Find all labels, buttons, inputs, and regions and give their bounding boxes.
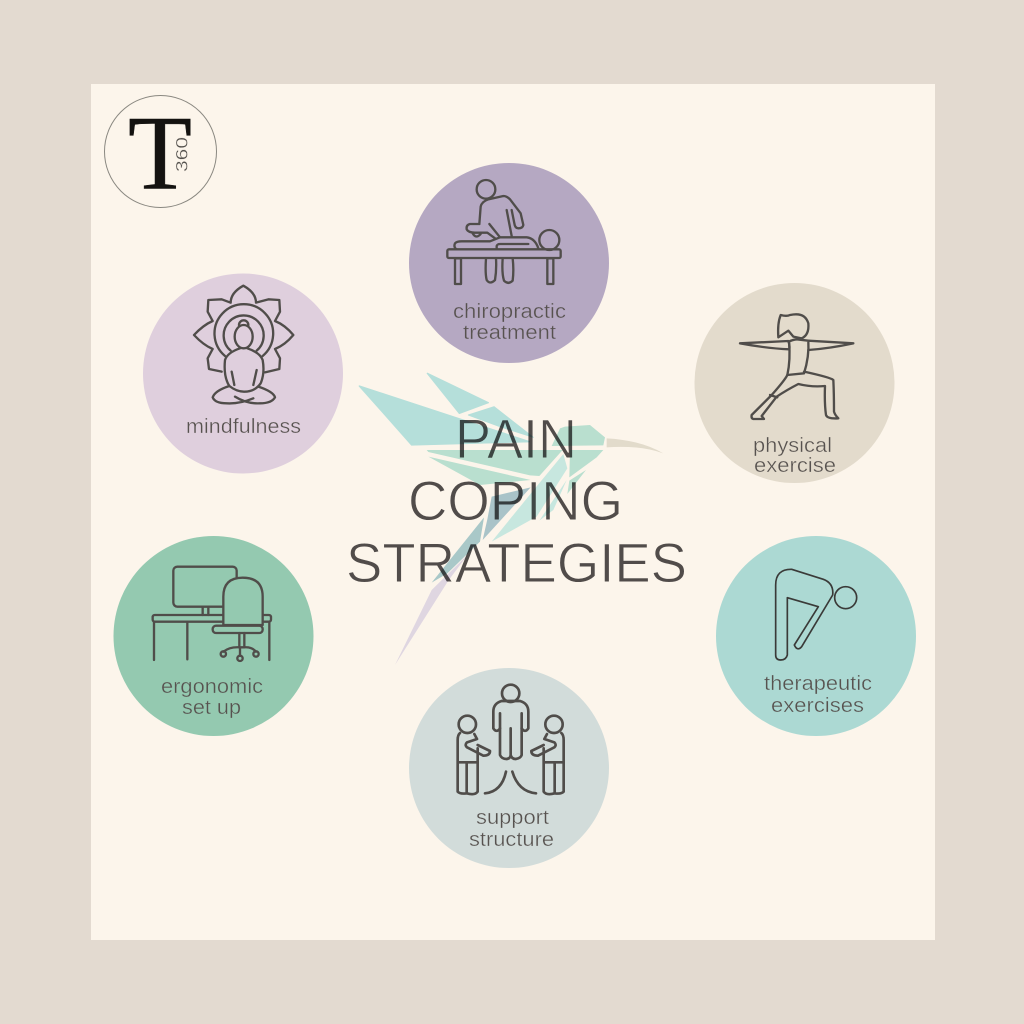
label: support structure: structure	[469, 829, 554, 851]
logo: T360	[104, 94, 216, 212]
label: support structure	[469, 807, 554, 851]
label: therapeutic exercises: therapeutic	[764, 673, 872, 695]
label: chiropractic treatment: chiropractic	[453, 301, 566, 323]
title: STRATEGIES	[346, 531, 687, 594]
panel: therapeutic exercises	[716, 536, 916, 736]
hummingbird watermark	[359, 373, 663, 665]
label: therapeutic exercises: exercises	[771, 695, 864, 717]
label: chiropractic treatment	[453, 301, 566, 344]
icon: warrior yoga pose	[740, 314, 853, 419]
panel: physical exercise	[694, 283, 894, 483]
icon: bending stretch figure	[776, 569, 857, 660]
panel: chiropractic treatment	[409, 163, 609, 363]
title	[346, 407, 687, 594]
label: ergonomic set up	[161, 676, 263, 719]
icon: desk, monitor and chair	[153, 567, 271, 661]
title: COPING	[408, 469, 623, 532]
panel: mindfulness	[143, 274, 343, 474]
label: physical exercise: exercise	[754, 455, 836, 477]
icon: three people supporting	[458, 685, 564, 794]
label: physical exercise	[753, 435, 836, 477]
label: ergonomic set up: ergonomic	[161, 676, 263, 698]
panel: ergonomic set up	[114, 536, 314, 736]
label: support structure: support	[476, 807, 549, 829]
logo: T360: T	[128, 94, 192, 212]
label: chiropractic treatment: treatment	[463, 322, 556, 344]
label: physical exercise: physical	[753, 435, 832, 457]
central cream panel	[91, 84, 935, 940]
label: ergonomic set up: set up	[182, 697, 241, 719]
label: mindfulness: mindfulness	[186, 416, 301, 438]
panel: support structure	[409, 668, 609, 868]
logo: T360: 360	[172, 137, 192, 172]
icon: meditating figure with lotus	[194, 286, 293, 403]
title: PAIN	[455, 407, 577, 470]
label: therapeutic exercises	[764, 673, 872, 717]
icon: chiropractor and patient	[447, 180, 561, 284]
